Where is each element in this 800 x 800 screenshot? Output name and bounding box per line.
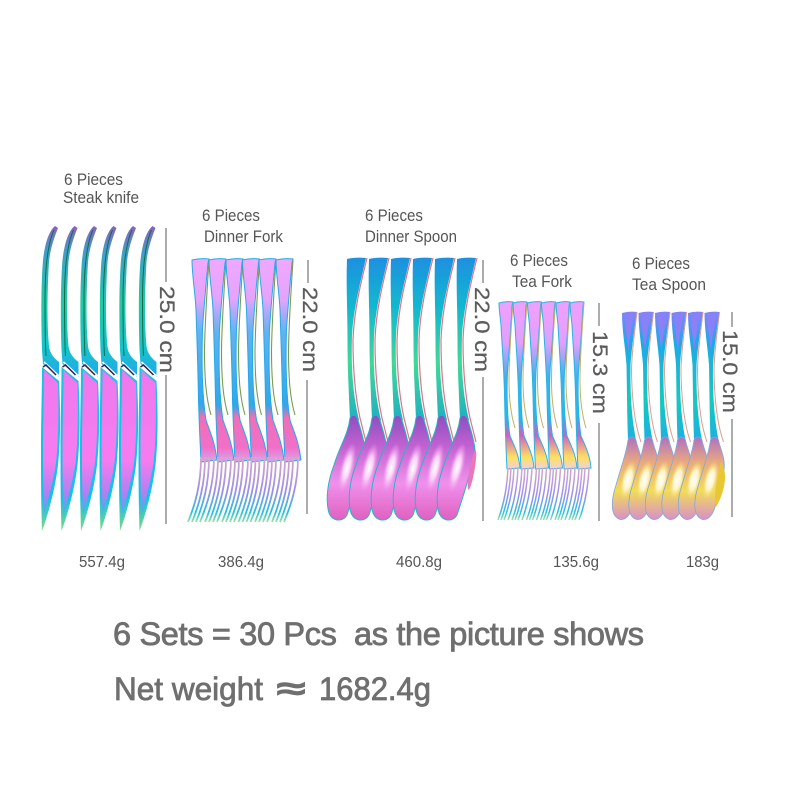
weight: dinner spoon: 460.8g (396, 554, 442, 571)
dimension: dinner spoon length: 22.0 cm (470, 287, 494, 372)
label: dinner spoon count: 6 Pieces (365, 207, 423, 225)
weight: steak knife: 557.4g (79, 554, 125, 571)
summary: net weight: 1682.4g (319, 671, 431, 707)
illustration: six tea spoons (612, 312, 725, 520)
label: dinner spoon name: Dinner Spoon (365, 228, 457, 246)
group: steak knives (41, 171, 179, 531)
group: tea spoons (612, 255, 742, 520)
illustration: six dinner spoons (327, 258, 478, 520)
label: tea fork count: 6 Pieces (510, 252, 568, 270)
summary: net weight: Net weight (114, 671, 263, 707)
dimension: tea fork length: 15.3 cm (588, 331, 612, 414)
label: steak knife name: Steak knife (63, 189, 139, 207)
group: dinner forks (188, 207, 322, 522)
label: steak knife count: 6 Pieces (64, 171, 123, 189)
summary: set count: 6 Sets = 30 Pcs as the picture shows (113, 616, 644, 652)
dimension: tea spoon length: 15.0 cm (718, 330, 742, 413)
illustration: six steak knives (41, 226, 158, 531)
illustration: six tea forks (498, 302, 591, 520)
weight: tea spoon: 183g (686, 554, 719, 571)
illustration: six dinner forks (188, 259, 301, 522)
dimension: dinner fork length: 22.0 cm (298, 287, 322, 372)
weight: tea fork: 135.6g (553, 554, 599, 571)
label: dinner fork name: Dinner Fork (204, 228, 284, 246)
weight: dinner fork: 386.4g (218, 554, 264, 571)
label: tea spoon name: Tea Spoon (632, 276, 706, 294)
label: dinner fork count: 6 Pieces (202, 207, 260, 225)
group: tea forks (498, 252, 612, 521)
summary: net weight: ≈ (277, 670, 305, 708)
group: dinner spoons (327, 207, 494, 521)
dimension: knife length: 25.0 cm (155, 286, 179, 373)
label: tea fork name: Tea Fork (512, 273, 573, 291)
label: tea spoon count: 6 Pieces (632, 255, 690, 273)
